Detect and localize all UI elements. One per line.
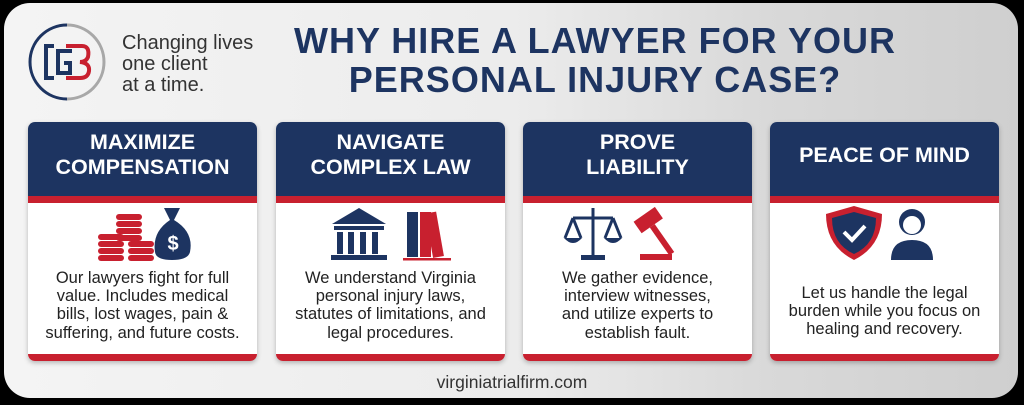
heading <box>28 122 257 203</box>
text: We understand Virginia <box>305 269 476 287</box>
text: burden while you focus on <box>789 302 980 320</box>
heading <box>770 122 999 203</box>
text: value. Includes medical <box>57 287 228 305</box>
tagline: Changing lives <box>122 32 253 54</box>
icon: coins and money bag: $ <box>167 233 179 255</box>
text: interview witnesses, <box>564 287 711 305</box>
footer url: virginiatrialfirm.com <box>437 372 587 392</box>
heading: PEACE OF MIND <box>799 143 970 167</box>
text: healing and recovery. <box>806 320 963 338</box>
text: legal procedures. <box>327 324 454 342</box>
heading: LIABILITY <box>586 155 689 179</box>
icon: shield and person <box>826 206 933 260</box>
text: bills, lost wages, pain & <box>57 305 228 323</box>
heading: NAVIGATE <box>337 130 444 154</box>
title: WHY HIRE A LAWYER FOR YOUR <box>294 20 896 61</box>
panel: prove liability <box>523 122 752 361</box>
heading: COMPENSATION <box>56 155 230 179</box>
heading <box>523 122 752 203</box>
text <box>789 284 980 338</box>
icon: courthouse and books <box>331 208 451 260</box>
heading: MAXIMIZE <box>90 130 195 154</box>
tagline: at a time. <box>122 74 204 96</box>
icon: coins and money bag <box>98 208 191 261</box>
text <box>45 269 240 342</box>
icon: scales and gavel <box>564 206 674 260</box>
text: personal injury laws, <box>316 287 465 305</box>
heading: PROVE <box>600 130 675 154</box>
title <box>294 20 896 100</box>
text: suffering, and future costs. <box>45 324 240 342</box>
text: Let us handle the legal <box>801 284 968 302</box>
text: establish fault. <box>585 324 690 342</box>
text: We gather evidence, <box>562 269 713 287</box>
logo <box>28 24 106 100</box>
heading: COMPLEX LAW <box>310 155 471 179</box>
tagline: one client <box>122 53 208 75</box>
heading <box>276 122 505 203</box>
text <box>562 269 713 342</box>
panel: maximize compensation <box>28 122 257 361</box>
title: PERSONAL INJURY CASE? <box>349 59 841 100</box>
text <box>295 269 486 342</box>
text: statutes of limitations, and <box>295 305 486 323</box>
text: and utilize experts to <box>562 305 713 323</box>
panel: navigate complex law <box>276 122 505 361</box>
panel: peace of mind <box>770 122 999 361</box>
text: Our lawyers fight for full <box>56 269 229 287</box>
tagline <box>122 32 253 96</box>
